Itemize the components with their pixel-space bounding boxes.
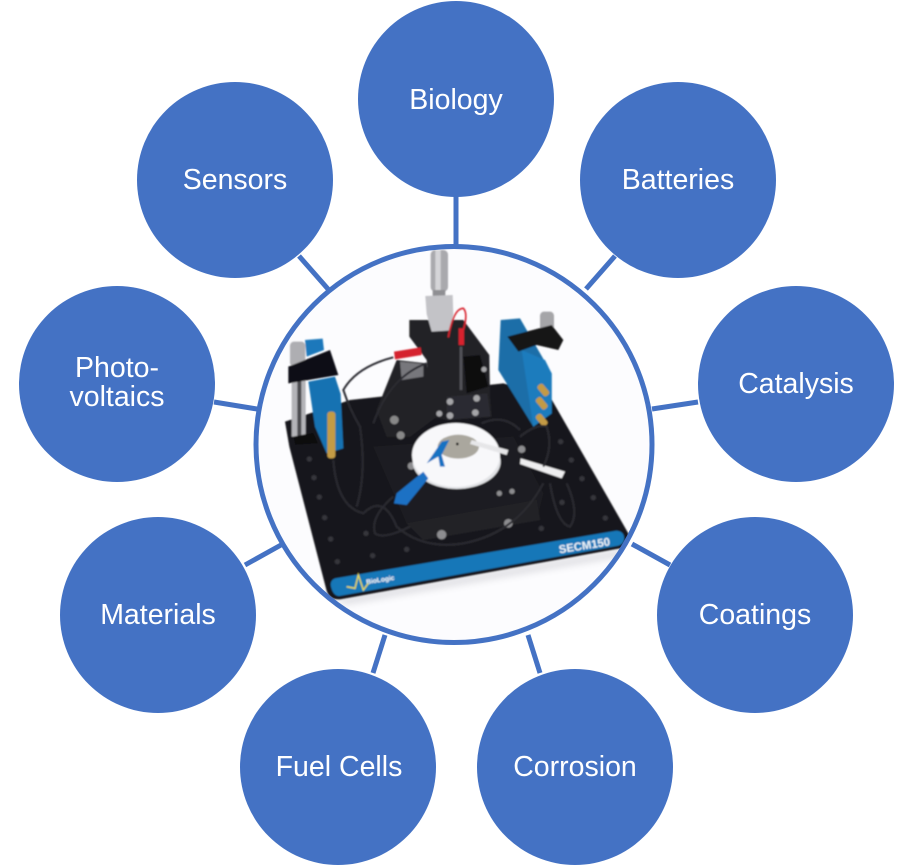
- circle: Corrosion: Corrosion: [513, 751, 637, 783]
- circle: Photovoltaics: Photo-: [75, 352, 159, 384]
- tower bolts: [436, 367, 487, 419]
- circle: Sensors: Sensors: [183, 164, 287, 196]
- circle: Fuel Cells: [240, 669, 436, 865]
- plate shadow: [333, 548, 633, 605]
- circle: Coatings: Coatings: [699, 599, 811, 631]
- right rail and blue module: [498, 318, 552, 427]
- central stage block: [407, 462, 514, 490]
- circle: Sensors: [137, 82, 333, 278]
- central instrument photo: [284, 250, 629, 607]
- circle: Biology: [358, 1, 554, 197]
- stage screws: [408, 446, 525, 539]
- circle: Catalysis: [698, 286, 894, 482]
- central instrument photo: BioLogic: [366, 575, 395, 586]
- circle: Corrosion: [477, 669, 673, 865]
- circle: Fuel Cells: Fuel Cells: [276, 751, 402, 783]
- white connector: [520, 458, 565, 478]
- left gold connectors: [327, 412, 335, 458]
- black cables: [333, 357, 574, 545]
- circle: Materials: Materials: [100, 599, 216, 631]
- circle: Materials: [60, 517, 256, 713]
- right gold connectors: [535, 383, 550, 427]
- circle: Photovoltaics: [19, 286, 215, 482]
- circle: Catalysis: Catalysis: [738, 368, 854, 400]
- central hub ring: [256, 246, 652, 642]
- white electrochemical cell: [411, 456, 502, 490]
- engraved strip labels: SECM150: [558, 536, 611, 556]
- connector lines between hub and topic circles: [214, 195, 698, 673]
- circle: Photovoltaics: voltaics: [69, 381, 165, 413]
- circle: Coatings: [657, 517, 853, 713]
- breadboard plate: [285, 383, 629, 599]
- circle: Biology: Biology: [409, 84, 503, 116]
- blue label strip: [331, 531, 624, 596]
- circle: Batteries: Batteries: [622, 164, 734, 196]
- left rail: [292, 380, 306, 437]
- blue crocodile clip and connector: [427, 440, 449, 467]
- plate holes: [307, 439, 608, 564]
- central tower: [409, 320, 492, 420]
- circle: Batteries: [580, 82, 776, 278]
- linear stage blocks: [377, 360, 437, 437]
- red connectors: [394, 347, 422, 359]
- micrometer: [431, 250, 448, 292]
